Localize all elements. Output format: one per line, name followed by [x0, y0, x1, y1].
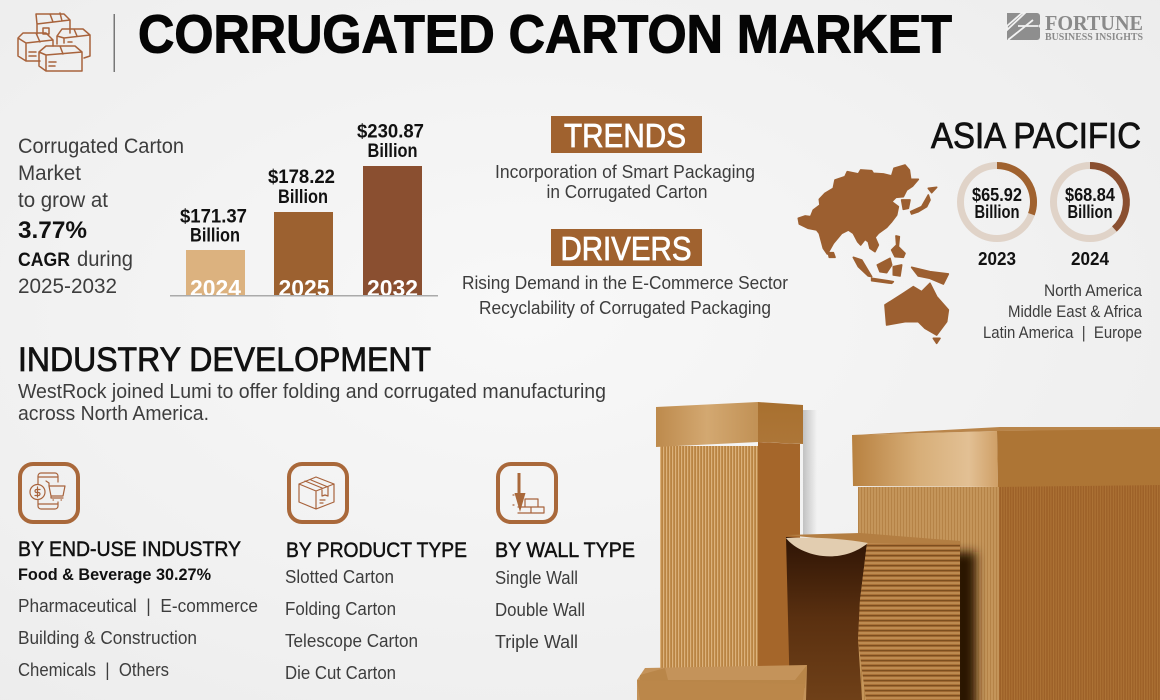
text block: market growth: CAGR	[18, 250, 70, 271]
text block: other regions: Middle East & Africa	[1008, 303, 1143, 321]
panel: drivers: DRIVERS	[560, 230, 692, 267]
donut: 2023	[960, 166, 1034, 269]
donut: 2023: 2023	[978, 249, 1016, 269]
panel: drivers	[462, 229, 788, 318]
text block: other regions: North America	[1044, 282, 1143, 300]
donut: 2024: 2024	[1071, 249, 1109, 269]
panel: trends: in Corrugated Carton	[546, 181, 708, 202]
text block: market growth	[18, 135, 184, 298]
segment: wall type: BY WALL TYPE	[495, 539, 635, 562]
panel: trends: Incorporation of Smart Packaging	[495, 161, 755, 182]
bar chart: market size: 2024	[190, 275, 241, 301]
bar chart: market size: Billion	[278, 187, 328, 208]
logo: Fortune Business Insights: BUSINESS INSIGHTS	[1045, 32, 1143, 43]
donut: 2023: $65.92	[972, 185, 1022, 205]
heading: Asia Pacific: ASIA PACIFIC	[931, 115, 1141, 156]
icon: e-commerce phone and cart	[20, 464, 78, 522]
map: Asia Pacific	[798, 165, 948, 343]
panel: trends	[495, 116, 755, 202]
logo: Fortune Business Insights: FORTUNE	[1045, 11, 1143, 35]
segment: wall type: Double Wall	[495, 600, 585, 620]
segment: end-use industry: Pharmaceutical | E-commerce	[18, 596, 258, 616]
segment: product type: Slotted Carton	[285, 567, 394, 587]
donut: 2024: $68.84	[1065, 185, 1115, 205]
segment: product type: Folding Carton	[285, 599, 396, 619]
title: CORRUGATED CARTON MARKET	[138, 4, 952, 64]
segment: product type: Telescope Carton	[285, 631, 418, 651]
segment: end-use industry: Food & Beverage 30.27%	[18, 566, 211, 584]
text block: market growth: Market	[18, 162, 81, 185]
segment: end-use industry	[18, 538, 258, 680]
segment: product type	[285, 539, 467, 683]
text block: industry development	[18, 381, 606, 425]
text block: other regions: Latin America | Europe	[983, 324, 1142, 342]
bar chart: market size: Billion	[190, 226, 240, 246]
text block: market growth: Corrugated Carton	[18, 135, 184, 158]
illustration: corrugated boxes	[637, 402, 1160, 700]
icon: stacked cartons	[18, 13, 90, 71]
panel: drivers: Recyclability of Corrugated Packaging	[479, 297, 771, 318]
segment: end-use industry: Building & Construction	[18, 628, 197, 648]
icon: trowel and bricks	[498, 464, 556, 522]
text block: industry development: across North America.	[18, 403, 209, 425]
bar chart: market size: 2025	[278, 275, 330, 301]
text block: market growth: during	[77, 248, 133, 271]
header divider	[114, 14, 115, 72]
bar chart: market size: $171.37	[180, 206, 247, 228]
segment: wall type	[495, 539, 635, 652]
segment: end-use industry: BY END-USE INDUSTRY	[18, 538, 241, 561]
panel: trends: TRENDS	[564, 117, 686, 154]
donut: 2023: Billion	[974, 202, 1020, 222]
bar chart: market size: Billion	[368, 141, 418, 162]
bar chart: market size	[170, 122, 438, 301]
donut: 2024	[1054, 166, 1126, 269]
text block: market growth: to grow at	[18, 189, 108, 212]
segment: end-use industry: Chemicals | Others	[18, 660, 169, 680]
icon: parcel box	[289, 464, 347, 522]
segment: wall type: Single Wall	[495, 568, 578, 588]
text block: other regions	[983, 282, 1143, 342]
segment: product type: Die Cut Carton	[285, 663, 396, 683]
text block: market growth: 2025-2032	[18, 275, 117, 298]
segment: product type: BY PRODUCT TYPE	[286, 539, 467, 562]
text block: market growth: 3.77%	[18, 217, 87, 244]
text block: industry development: WestRock joined Lumi to offer folding and corrugated manufacturing	[18, 381, 606, 403]
logo: Fortune Business Insights	[1007, 11, 1143, 43]
bar chart: market size: $178.22	[268, 167, 335, 188]
heading: industry development: INDUSTRY DEVELOPMENT	[18, 341, 431, 379]
bar chart: market size: 2032	[367, 275, 418, 301]
bar chart: market size: $230.87	[357, 122, 424, 142]
donut: 2024: Billion	[1068, 202, 1112, 222]
panel: drivers: Rising Demand in the E-Commerce Sector	[462, 272, 788, 293]
segment: wall type: Triple Wall	[495, 632, 578, 652]
